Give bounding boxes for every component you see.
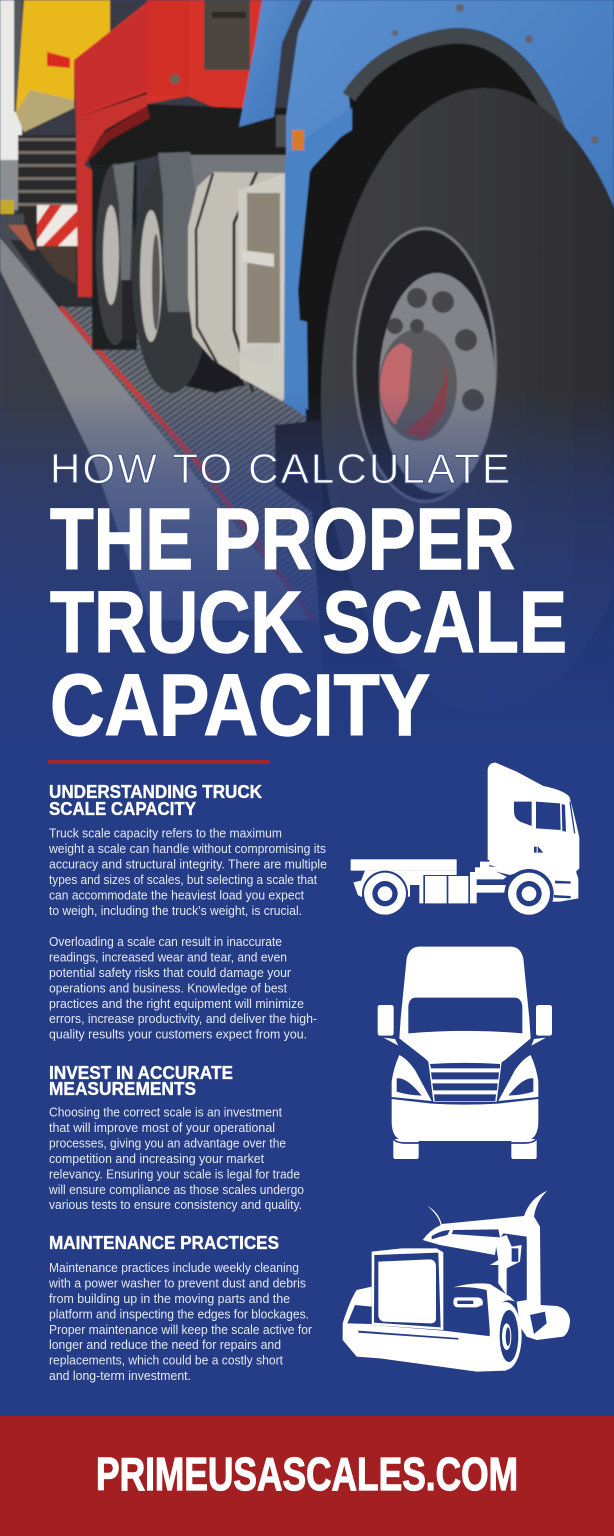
paragraph: and long-term investment.	[49, 1368, 191, 1383]
paragraph	[48, 1260, 313, 1383]
paragraph: platform and inspecting the edges for blockages.	[49, 1306, 309, 1321]
paragraph: competition and increasing your market	[49, 1151, 264, 1166]
paragraph	[48, 1104, 304, 1212]
heading: MEASUREMENTS	[49, 1079, 196, 1099]
heading: MAINTENANCE PRACTICES	[49, 1233, 279, 1253]
hero photo: truck on scale	[0, 0, 614, 790]
paragraph 2: potential safety risks that could damage your	[49, 965, 292, 980]
paragraph 2: errors, increase productivity, and deliver the high-	[49, 1011, 317, 1026]
section: understanding truck scale capacity	[48, 782, 327, 1042]
heading	[49, 1063, 233, 1099]
paragraph: various tests to ensure consistency and quality.	[49, 1197, 302, 1212]
paragraph 2: practices and the right equipment will minimize	[49, 996, 304, 1011]
heading: SCALE CAPACITY	[49, 799, 196, 819]
paragraph: Proper maintenance will keep the scale active for	[49, 1322, 313, 1337]
heading: UNDERSTANDING TRUCK	[49, 782, 262, 802]
paragraph 1: weight a scale can handle without compromising its	[48, 841, 326, 856]
footer band	[0, 1416, 614, 1536]
paragraph: will ensure compliance as those scales undergo	[48, 1182, 304, 1197]
icon: conventional semi truck	[343, 1191, 570, 1372]
photo fade overlay	[0, 390, 614, 800]
paragraph 2	[49, 934, 317, 1042]
paragraph: that will improve most of your operational	[49, 1120, 275, 1135]
icon: front view truck	[378, 947, 552, 1159]
title: THE PROPER	[50, 491, 515, 588]
paragraph 2: operations and business. Knowledge of best	[49, 980, 287, 995]
section: invest in accurate measurements	[48, 1063, 304, 1212]
section: maintenance practices	[48, 1233, 313, 1383]
paragraph: Choosing the correct scale is an investment	[49, 1104, 282, 1120]
paragraph: longer and reduce the need for repairs and	[49, 1337, 281, 1352]
paragraph 1: can accommodate the heaviest load you expect	[49, 887, 304, 902]
paragraph 2: Overloading a scale can result in inaccurate	[49, 934, 282, 949]
paragraph 1: accuracy and structural integrity. There are multiple	[49, 856, 327, 871]
paragraph 2: quality results your customers expect from you.	[49, 1027, 307, 1042]
heading: INVEST IN ACCURATE	[49, 1063, 233, 1083]
paragraph: relevancy. Ensuring your scale is legal for trade	[49, 1166, 300, 1181]
paragraph 1: to weigh, including the truck’s weight, is crucial.	[49, 903, 302, 918]
title: HOW TO CALCULATE	[50, 445, 510, 492]
paragraph: replacements, which could be a costly short	[49, 1353, 283, 1368]
heading	[49, 782, 262, 819]
paragraph 1	[48, 826, 327, 918]
paragraph: Maintenance practices include weekly cleaning	[49, 1260, 299, 1275]
paragraph: from building up in the moving parts and the	[49, 1291, 290, 1306]
icon: side view truck	[351, 763, 579, 918]
paragraph 1: Truck scale capacity refers to the maximum	[49, 826, 282, 840]
paragraph 2: readings, increased wear and tear, and even	[49, 949, 287, 964]
title	[50, 445, 567, 754]
red divider	[48, 760, 270, 764]
title: CAPACITY	[50, 657, 430, 754]
paragraph 1: types and sizes of scales, but selecting a scale that	[49, 872, 317, 887]
paragraph: processes, giving you an advantage over the	[49, 1135, 286, 1150]
paragraph: with a power washer to prevent dust and debris	[48, 1275, 306, 1290]
